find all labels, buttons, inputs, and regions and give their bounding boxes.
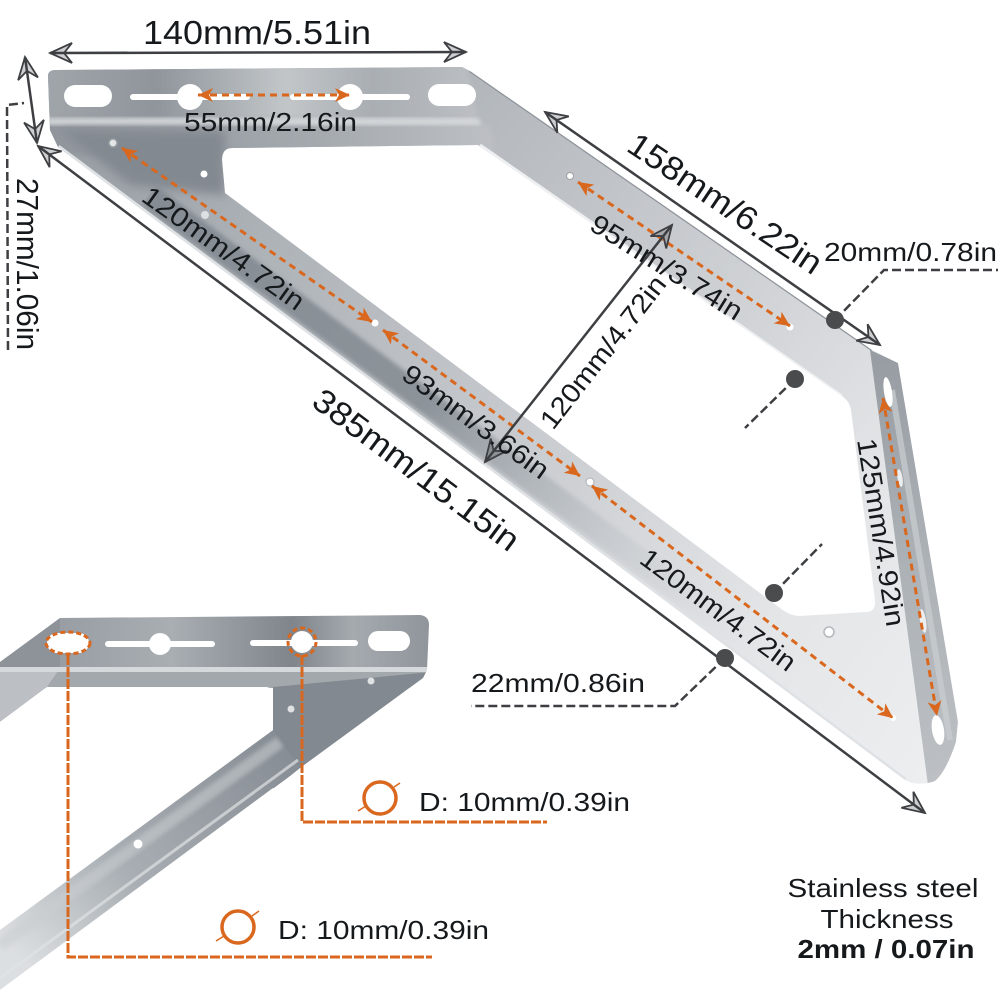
label: 120mm lower strut: 120mm/4.72in bbox=[634, 543, 802, 677]
material note bbox=[788, 873, 978, 964]
dimension arrows bbox=[25, 52, 925, 813]
material note: Stainless steel bbox=[788, 873, 978, 903]
label: hole diameter two: D: 10mm/0.39in bbox=[278, 915, 489, 945]
label: 55mm slot spacing: 55mm/2.16in bbox=[184, 107, 357, 137]
dashed leader lines and dots bbox=[7, 103, 998, 706]
label: 22mm strut width: 22mm/0.86in bbox=[471, 668, 645, 698]
label: 27mm flange: 27mm/1.06in bbox=[10, 178, 45, 350]
main bracket bbox=[48, 67, 958, 784]
slots and holes bbox=[64, 84, 946, 746]
label: 20mm strut width: 20mm/0.78in bbox=[824, 237, 997, 267]
orange hole diameter callouts on inset bbox=[46, 628, 547, 957]
label: 93mm hole spacing: 93mm/3.66in bbox=[396, 359, 555, 485]
label: 158mm top edge: 158mm/6.22in bbox=[621, 125, 829, 282]
label: 120mm upper strut: 120mm/4.72in bbox=[137, 180, 310, 316]
inset slots and holes bbox=[47, 631, 410, 848]
label: 120mm height: 120mm/4.72in bbox=[534, 270, 672, 435]
material note: Thickness bbox=[820, 904, 954, 934]
label: hole diameter one: D: 10mm/0.39in bbox=[419, 787, 630, 817]
label: 140mm width: 140mm/5.51in bbox=[143, 14, 371, 51]
inset bracket detail bbox=[0, 610, 440, 990]
orange dashed measure lines on main bracket bbox=[122, 95, 937, 718]
material note: 2mm / 0.07in bbox=[798, 934, 974, 964]
label: 385mm long edge: 385mm/15.15in bbox=[306, 381, 527, 558]
label: 95mm hole spacing: 95mm/3.74in bbox=[585, 209, 748, 326]
label: 125mm flange length: 125mm/4.92in bbox=[851, 436, 910, 629]
